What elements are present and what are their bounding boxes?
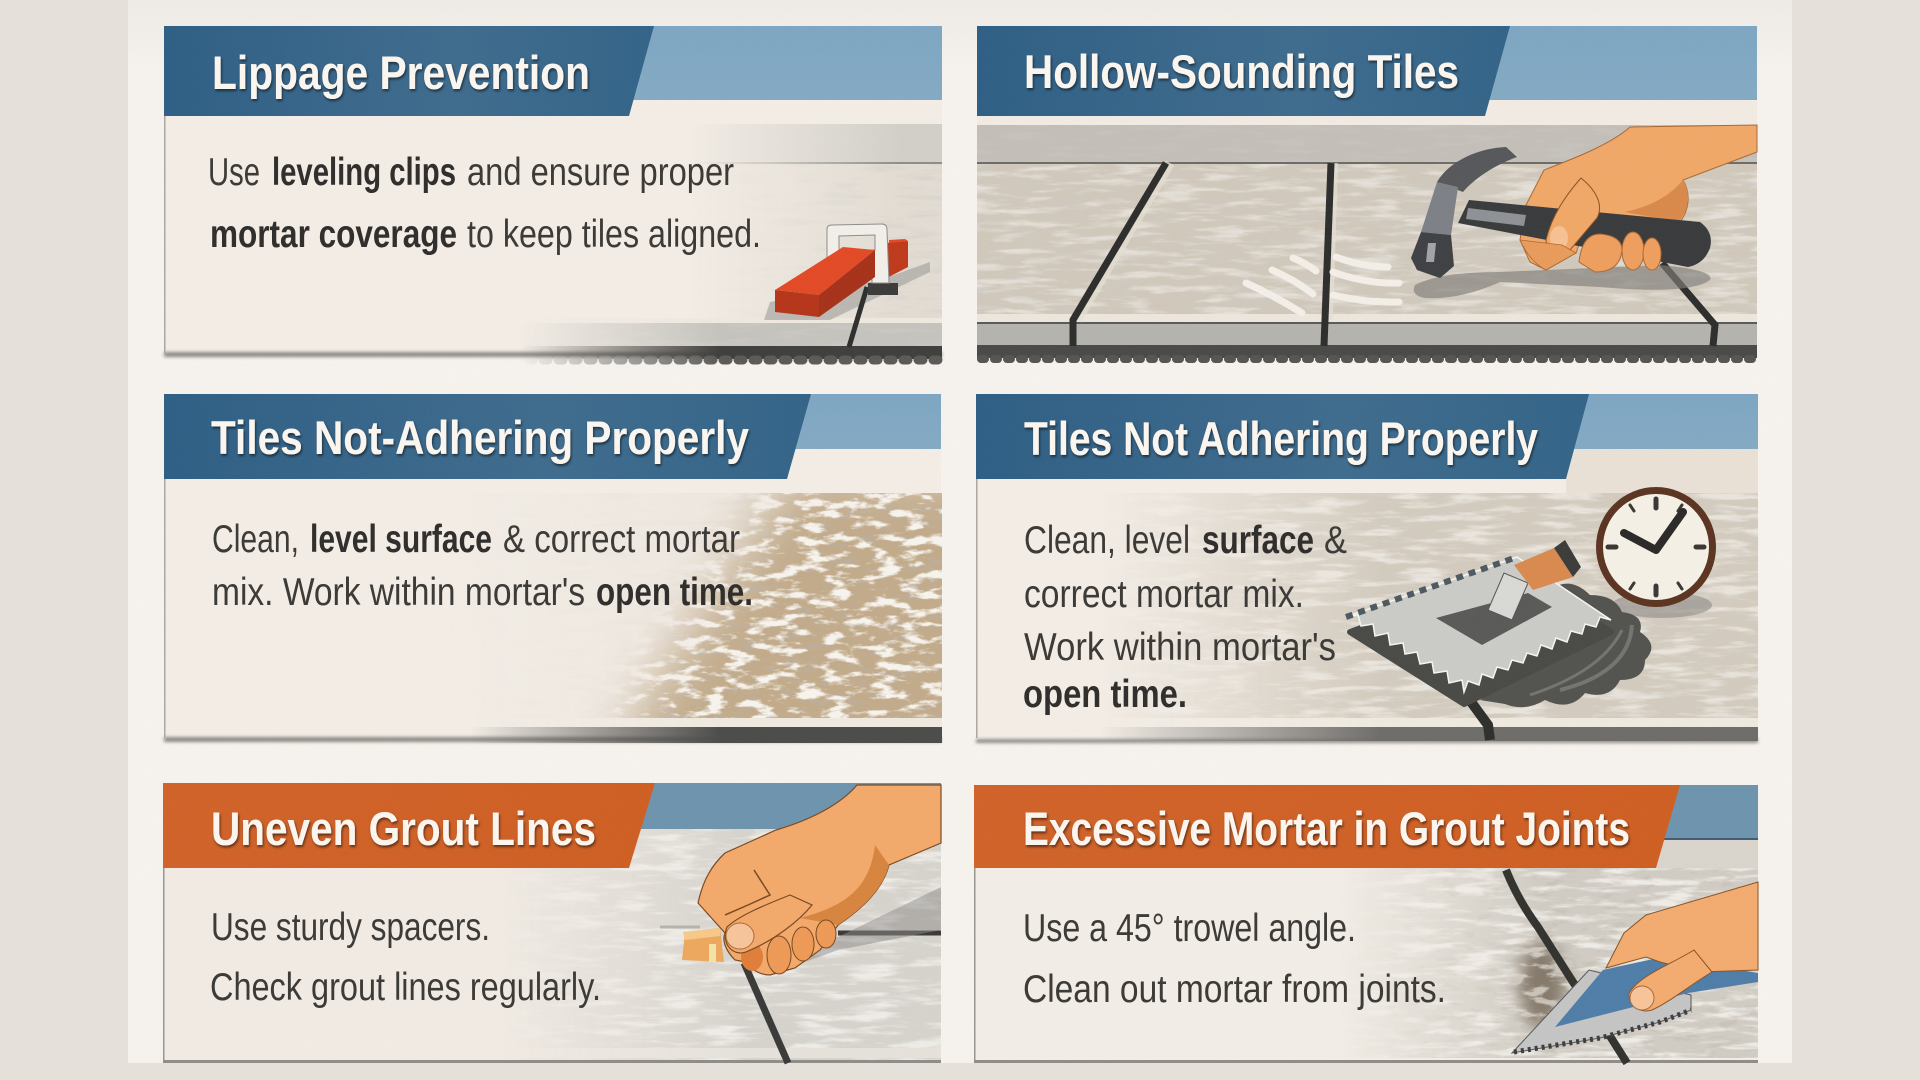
title: Tiles Not-Adhering Properly [211,411,749,464]
body text: Use a 45° trowel angle. [1023,907,1356,950]
title: Excessive Mortar in Grout Joints [1023,802,1630,855]
body text: correct mortar mix. [1024,573,1304,616]
title: Tiles Not Adhering Properly [1024,412,1538,465]
icon: leveling clip [764,224,930,347]
title: Uneven Grout Lines [211,802,596,855]
mortar edge [482,718,942,743]
body text: surface [1202,519,1314,562]
body text [212,518,753,614]
grout joint [1506,870,1627,1063]
sound waves [1246,257,1399,313]
tile texture [1376,868,1758,1058]
heading strip [620,783,941,829]
body text: Use sturdy spacers. [211,906,490,949]
panel: uneven grout lines [163,783,941,1063]
body text: Work within mortar's [1024,626,1336,669]
panel: tiles not-adhering properly [164,394,942,743]
body text: open time. [1023,673,1187,716]
excess mortar debris [1506,932,1578,1035]
body text [1023,519,1347,716]
mottled tile texture [603,493,942,718]
body text: to keep tiles aligned. [467,213,761,256]
body text: open time. [596,571,753,614]
body text: Clean, level [1024,519,1190,562]
icon: notched trowel with mortar [1346,540,1651,707]
grout joints [1073,163,1715,346]
body text: & correct mortar [503,518,740,561]
heading banner [977,26,1510,116]
heading strip [1470,26,1757,100]
tile texture [1116,493,1758,741]
shadow of hand [763,887,941,977]
panel: excessive mortar in grout joints [974,785,1758,1063]
heading banner [974,785,1680,868]
heading banner [976,394,1589,479]
body text: Use [208,151,260,194]
icon: hammer and hand [1411,125,1757,278]
body text: and ensure proper [467,151,734,194]
icon: hand with trowel [1512,882,1758,1053]
icon: hand placing spacer [682,785,941,975]
body text: & [1324,519,1347,562]
grout joint [1466,695,1490,740]
heading banner [164,26,654,116]
panel: hollow-sounding tiles [977,26,1757,359]
body text: Check grout lines regularly. [210,966,601,1009]
beige band behind header [1566,449,1758,493]
panel: tiles not adhering properly [976,394,1758,743]
tile texture [572,829,941,1060]
body text: leveling clips [272,151,456,194]
body text [208,151,761,256]
title: Hollow-Sounding Tiles [1024,45,1459,98]
faint wisps [690,500,744,534]
body text: Clean out mortar from joints. [1023,968,1446,1011]
tile band behind header [1650,840,1758,868]
grout joints [744,933,941,1063]
panel: lippage prevention [164,26,942,360]
shadow of hammer [1414,265,1710,298]
body text: mix. Work within mortar's [212,571,585,614]
heading strip [780,394,941,449]
heading banner [163,783,655,868]
tile edge and mortar [528,318,942,364]
heading strip [1545,394,1758,449]
heading strip [620,26,942,100]
title: Lippage Prevention [212,46,590,99]
heading banner [164,394,811,479]
tile surface [977,125,1757,359]
tile texture [708,124,942,318]
body text: Clean, [212,518,299,561]
body text [210,906,601,1009]
body text: mortar coverage [210,213,457,256]
body text [1023,907,1446,1011]
heading strip [1650,785,1758,839]
icon: clock [1596,487,1716,618]
body text: level surface [310,518,492,561]
